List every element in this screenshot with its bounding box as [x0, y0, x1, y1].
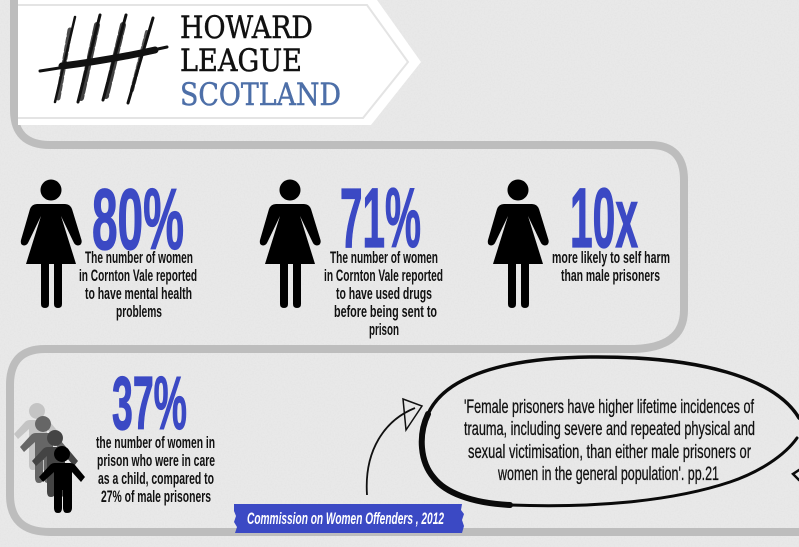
description: [324, 249, 443, 339]
stat: 80% mental health: [21, 172, 197, 321]
description: The number of women: [330, 249, 438, 267]
icon: woman: [21, 180, 82, 308]
logo wordmark: HOWARD: [180, 10, 313, 46]
description: [552, 249, 670, 285]
stat: 37% in care: 37%: [112, 361, 187, 445]
icon: four child figures: [14, 403, 85, 513]
bubble outline: [422, 357, 799, 506]
description: 27% of male prisoners: [101, 488, 211, 506]
description: prison who were in care: [97, 452, 215, 470]
logo wordmark: LEAGUE: [180, 43, 302, 79]
description: the number of women in: [96, 434, 215, 452]
stat: 10x self harm: [488, 171, 670, 308]
logo wordmark: [180, 10, 341, 113]
description: [96, 434, 215, 506]
icon: tally marks: [40, 15, 167, 103]
description: more likely to self harm: [552, 249, 670, 267]
description: to have used drugs: [336, 285, 432, 303]
icon: woman: [260, 180, 321, 308]
quote text: [464, 397, 755, 485]
stat: 10x self harm: 10x: [570, 171, 638, 265]
description: The number of women: [85, 249, 193, 267]
description: before being sent to: [334, 303, 437, 321]
description: to have mental health: [85, 285, 192, 303]
logo wordmark: SCOTLAND: [180, 77, 341, 113]
description: problems: [116, 303, 162, 321]
logo sign shape: [18, 0, 421, 125]
speech bubble: [422, 357, 799, 506]
logo panel: [18, 0, 421, 125]
description: in Cornton Vale reported: [324, 267, 443, 285]
number 80%: 80%: [92, 172, 184, 268]
source banner: [234, 504, 464, 533]
source banner: Commission on Women Offenders , 2012: [247, 510, 444, 528]
stat: 37% in care: [14, 361, 215, 513]
stat: 71% drugs: 71%: [340, 171, 421, 265]
icon: woman: [488, 180, 549, 308]
description: in Cornton Vale reported: [79, 267, 197, 285]
arrow: [367, 399, 422, 495]
description: than male prisoners: [561, 267, 660, 285]
logo sign inner line: [18, 5, 408, 118]
description: [79, 249, 197, 321]
stat: 71% drugs: [260, 171, 443, 339]
description: as a child, compared to: [98, 470, 214, 488]
description: prison: [369, 321, 399, 339]
